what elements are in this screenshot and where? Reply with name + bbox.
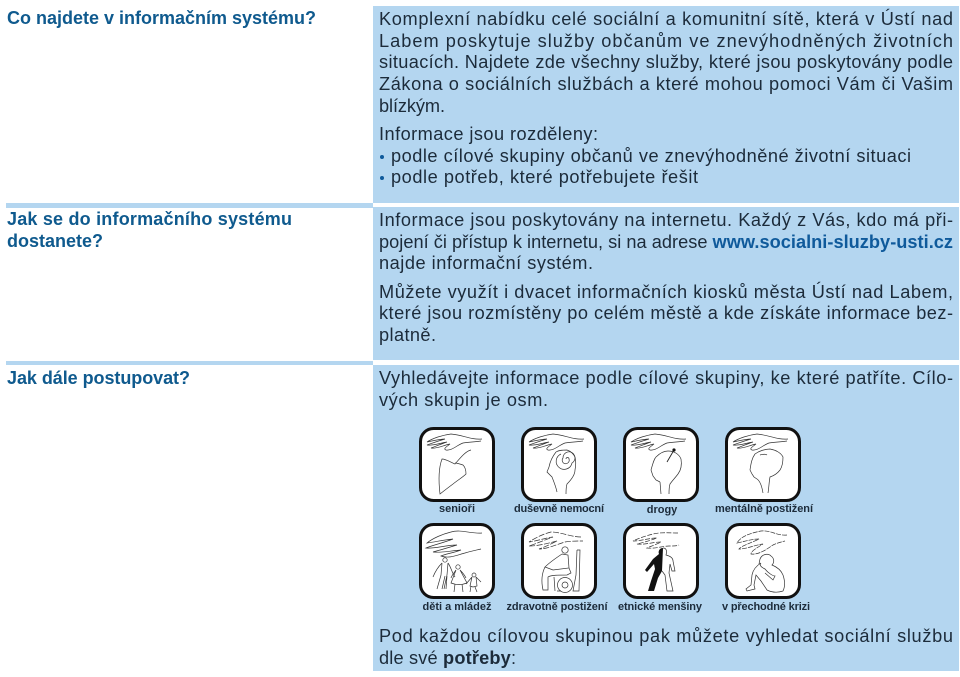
text: information division: podle cílové skupiny občanů ve znevýhodněné životní situaci: [391, 146, 911, 166]
divider bar: second section: [6, 203, 373, 208]
panel: access: [373, 207, 959, 360]
text: search by target group: [379, 368, 953, 410]
label: seniors: senioři: [439, 503, 475, 515]
text: internet access: pojení či přístup k internetu, si na adrese www.socialni-sluzby-usti.cz: [379, 232, 953, 252]
text: search by target group: vých skupin je osm.: [379, 390, 548, 410]
icon: drugs: [624, 428, 698, 500]
panel: target groups: [373, 365, 959, 671]
label: children and youth: děti a mládež: [422, 601, 492, 613]
text: kiosks: které jsou rozmístěny po celém městě a kde získáte informace bez-: [379, 303, 953, 323]
text: intro paragraph: [379, 8, 953, 116]
heading: how to proceed: Jak dále postupovat?: [7, 368, 190, 388]
text: search by need: dle své potřeby:: [379, 648, 516, 668]
heading: how to access: Jak se do informačního systému: [7, 209, 292, 229]
heading: what you find: Co najdete v informačním systému?: [7, 8, 316, 28]
label: mentally disabled: mentálně postižení: [715, 503, 814, 515]
text: kiosks: platně.: [379, 325, 436, 345]
icon: mentally disabled: [726, 428, 800, 500]
text: internet access: Informace jsou poskytovány na internetu. Každý z Vás, kdo má při-: [379, 210, 953, 230]
text: search by need: Pod každou cílovou skupinou pak můžete vyhledat sociální službu: [379, 626, 953, 646]
text: intro paragraph: Komplexní nabídku celé sociální a komunitní sítě, která v Ústí nad: [379, 8, 953, 29]
text: search by target group: Vyhledávejte informace podle cílové skupiny, ke které patříte. Cílo-: [379, 368, 953, 388]
icon: mentally ill: [522, 428, 596, 500]
text: information division: podle potřeb, které potřebujete řešit: [391, 167, 698, 187]
icon: children and youth: [420, 524, 494, 598]
text: kiosks: Můžete využít i dvacet informačních kiosků města Ústí nad Labem,: [379, 281, 953, 302]
text: internet access: [379, 210, 953, 273]
text: internet access: najde informační systém.: [379, 253, 593, 273]
label: ethnic minorities: etnické menšiny: [618, 601, 703, 613]
label: people in crisis: v přechodné krizi: [722, 601, 810, 613]
label: mentally ill: duševně nemocní: [514, 503, 605, 515]
heading: how to access: dostanete?: [7, 231, 103, 251]
text: kiosks: [379, 281, 953, 345]
text: information division: [379, 124, 911, 187]
text: search by need: [379, 626, 953, 668]
text: information division: Informace jsou rozděleny:: [379, 124, 598, 144]
divider bar: third section: [6, 361, 373, 365]
heading: how to access: [7, 209, 292, 251]
text: intro paragraph: Labem poskytuje služby občanům ve znevýhodněných životních: [379, 31, 953, 51]
text: intro paragraph: situacích. Najdete zde všechny služby, které jsou poskytovány podle: [379, 52, 953, 72]
label: physically disabled: zdravotně postižení: [506, 601, 608, 613]
icon: ethnic minorities: [624, 524, 698, 598]
text: intro paragraph: blízkým.: [379, 96, 445, 116]
icon: seniors: [420, 428, 494, 500]
icon: people in crisis: [726, 524, 800, 598]
icon: physically disabled: [522, 524, 596, 598]
panel: overview: [373, 6, 959, 203]
text: intro paragraph: Zákona o sociálních službách a které mohou pomoci Vám či Vašim: [379, 74, 953, 94]
label: drugs: drogy: [647, 504, 678, 516]
